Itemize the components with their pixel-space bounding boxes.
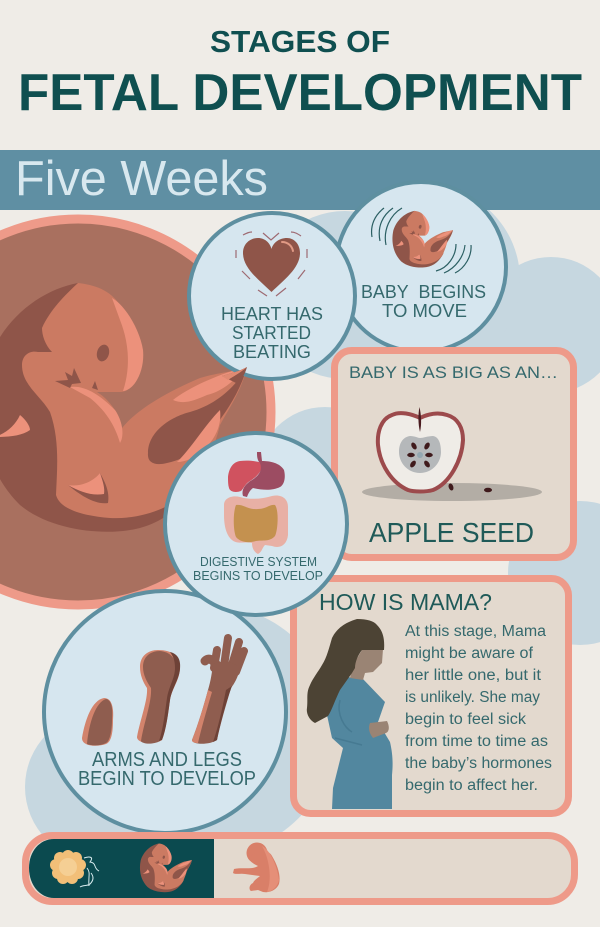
panel: how is mama: HOW IS MAMA? xyxy=(319,589,492,615)
heading band: five weeks xyxy=(0,150,600,210)
panel: heart has started beating: STARTED xyxy=(232,322,311,343)
panel: digestive system: BEGINS TO DEVELOP xyxy=(193,568,323,583)
embryo limb tip overlapping heart circle xyxy=(222,367,247,384)
text block: mama paragraph: begin to feel sick xyxy=(405,711,526,728)
icon: limb stages xyxy=(82,638,244,746)
panel: heart has started beating xyxy=(189,213,355,379)
panel: baby begins to move: BABY BEGINS xyxy=(361,281,486,302)
icon: heart xyxy=(236,232,307,296)
panel: how is mama xyxy=(294,578,568,814)
heading band: five weeks: Five Weeks xyxy=(15,152,268,206)
text block: mama paragraph: begin to affect her. xyxy=(405,777,538,794)
panel: arms and legs: BEGIN TO DEVELOP xyxy=(78,768,256,790)
timeline bar xyxy=(26,836,574,902)
timeline active section xyxy=(29,839,214,898)
text block: mama paragraph: from time to time as xyxy=(405,733,548,750)
text block: mama paragraph: the baby’s hormones xyxy=(405,755,552,772)
panel: heart has started beating: BEATING xyxy=(233,341,311,362)
hand limb xyxy=(192,638,244,744)
icon: five week embryo xyxy=(140,843,192,892)
panel: heart has started beating: HEART HAS xyxy=(221,303,323,324)
panel: arms and legs xyxy=(44,591,286,833)
icon: apple on shadow xyxy=(362,407,542,501)
title xyxy=(18,24,582,122)
panel: baby size card xyxy=(334,350,574,558)
text block: mama paragraph: might be aware of xyxy=(405,645,534,662)
panel: baby begins to move: TO MOVE xyxy=(382,300,467,321)
text block: mama paragraph: her little one, but it xyxy=(405,667,542,684)
title: FETAL DEVELOPMENT xyxy=(18,64,582,122)
panel: digestive system xyxy=(165,433,347,615)
icon: pregnant mother xyxy=(307,619,393,809)
panel: baby size card: BABY IS AS BIG AS AN… xyxy=(349,363,558,382)
text block: mama paragraph: is unlikely. She may xyxy=(405,689,540,706)
text block: mama paragraph: At this stage, Mama xyxy=(405,623,546,640)
icon: moving embryo xyxy=(372,208,471,273)
text block: mama paragraph xyxy=(405,623,552,794)
panel: baby size card: APPLE SEED xyxy=(369,517,534,548)
icon: fertilized egg xyxy=(50,850,99,887)
background blobs xyxy=(25,185,600,862)
title: STAGES OF xyxy=(210,24,390,59)
icon: next stage fetus xyxy=(233,842,280,892)
large embryo circle xyxy=(0,219,271,605)
paddle limb xyxy=(137,650,180,744)
panel: baby begins to move xyxy=(336,182,506,352)
icon: digestive organs xyxy=(224,452,288,554)
panel: digestive system: DIGESTIVE SYSTEM xyxy=(200,554,317,569)
limb bud xyxy=(82,698,113,746)
panel: arms and legs: ARMS AND LEGS xyxy=(92,749,242,771)
